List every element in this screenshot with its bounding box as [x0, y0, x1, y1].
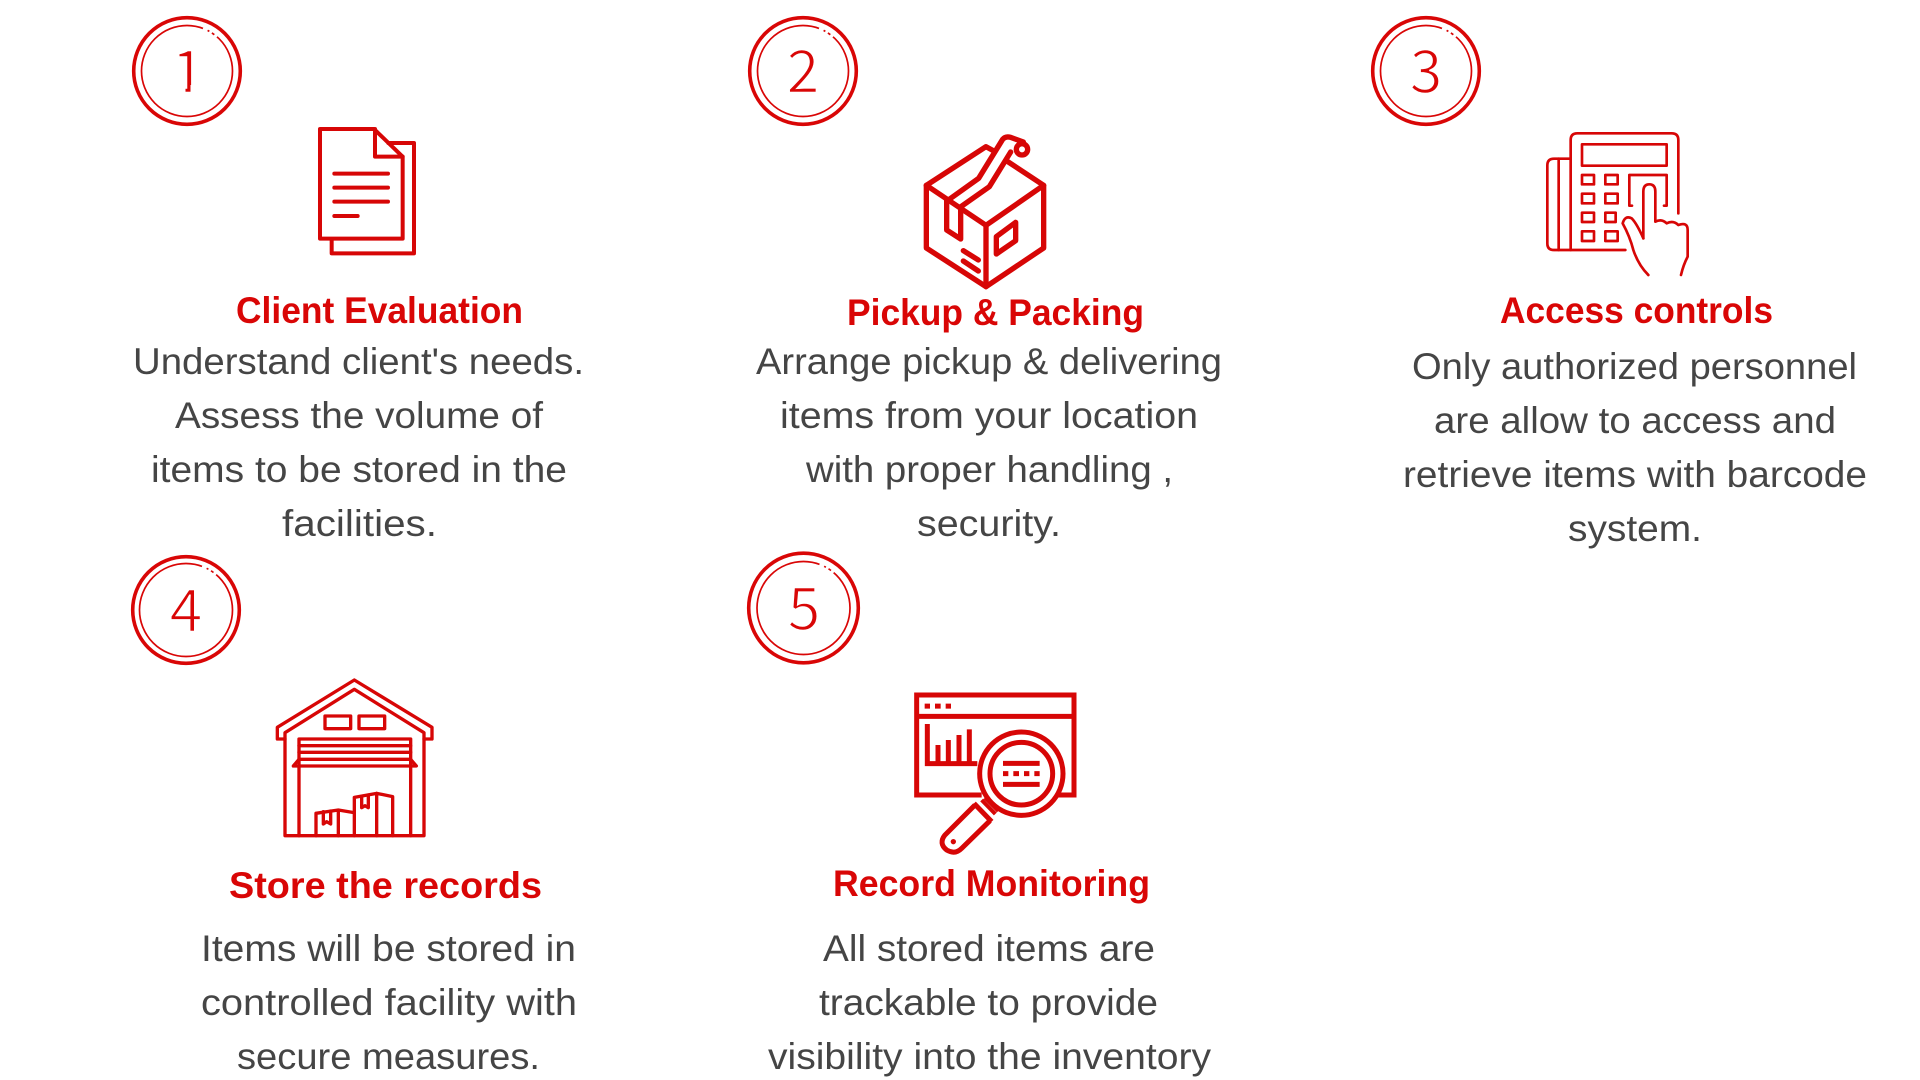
heading: Store the records: Store the records	[229, 865, 542, 906]
panel: step 1 client evaluation	[133, 18, 584, 544]
panel: step 3 access controls	[1373, 18, 1867, 549]
number badge 1: 1	[172, 24, 204, 110]
number badge 4: 4	[170, 564, 202, 648]
description: client evaluation	[133, 341, 584, 544]
panel: step 2 pickup and packing	[750, 18, 1222, 544]
number badge 2	[750, 18, 856, 124]
heading: Pickup & Packing: Pickup & Packing	[847, 292, 1144, 333]
number badge 1	[134, 18, 240, 124]
number badge 5	[749, 553, 858, 663]
number badge 3: 3	[1410, 24, 1442, 110]
description: pickup and packing: security.	[917, 503, 1061, 544]
number badge 3	[1373, 18, 1479, 124]
description: pickup and packing: Arrange pickup & delivering	[756, 341, 1222, 382]
description: pickup and packing: items from your location	[780, 395, 1198, 436]
description: access controls: system.	[1568, 508, 1702, 549]
description: pickup and packing	[756, 341, 1222, 544]
number badge 2: 2	[787, 24, 819, 110]
description: client evaluation: items to be stored in the	[151, 449, 567, 490]
panel: step 5 record monitoring	[749, 553, 1212, 1077]
description: access controls: Only authorized personnel	[1412, 346, 1857, 387]
heading: Client Evaluation: Client Evaluation	[236, 290, 523, 331]
panel: step 4 store the records	[133, 557, 577, 1077]
heading: Access controls: Access controls	[1500, 290, 1773, 331]
description: client evaluation: Assess the volume of	[175, 395, 544, 436]
number badge 4	[133, 557, 239, 663]
description: store the records: secure measures.	[237, 1036, 540, 1077]
number badge 5: 5	[788, 562, 820, 646]
description: access controls: retrieve items with barcode	[1403, 454, 1867, 495]
icon: package box	[926, 137, 1044, 287]
icon: warehouse	[277, 680, 432, 836]
description: record monitoring: visibility into the inventory	[768, 1036, 1212, 1077]
description: store the records: Items will be stored in	[201, 928, 576, 969]
description: record monitoring: trackable to provide	[819, 982, 1158, 1023]
description: access controls	[1403, 346, 1867, 549]
description: client evaluation: Understand client's needs.	[133, 341, 584, 382]
description: store the records	[201, 928, 577, 1077]
heading: Record Monitoring: Record Monitoring	[833, 863, 1150, 904]
description: pickup and packing: with proper handling ,	[805, 449, 1173, 490]
description: client evaluation: facilities.	[282, 503, 437, 544]
icon: documents	[320, 129, 414, 253]
description: store the records: controlled facility with	[201, 982, 577, 1023]
description: access controls: are allow to access and	[1434, 400, 1836, 441]
icon: dashboard with magnifier	[917, 695, 1074, 852]
description: record monitoring: All stored items are	[823, 928, 1155, 969]
description: record monitoring	[768, 928, 1212, 1077]
icon: keypad and hand	[1547, 133, 1688, 275]
